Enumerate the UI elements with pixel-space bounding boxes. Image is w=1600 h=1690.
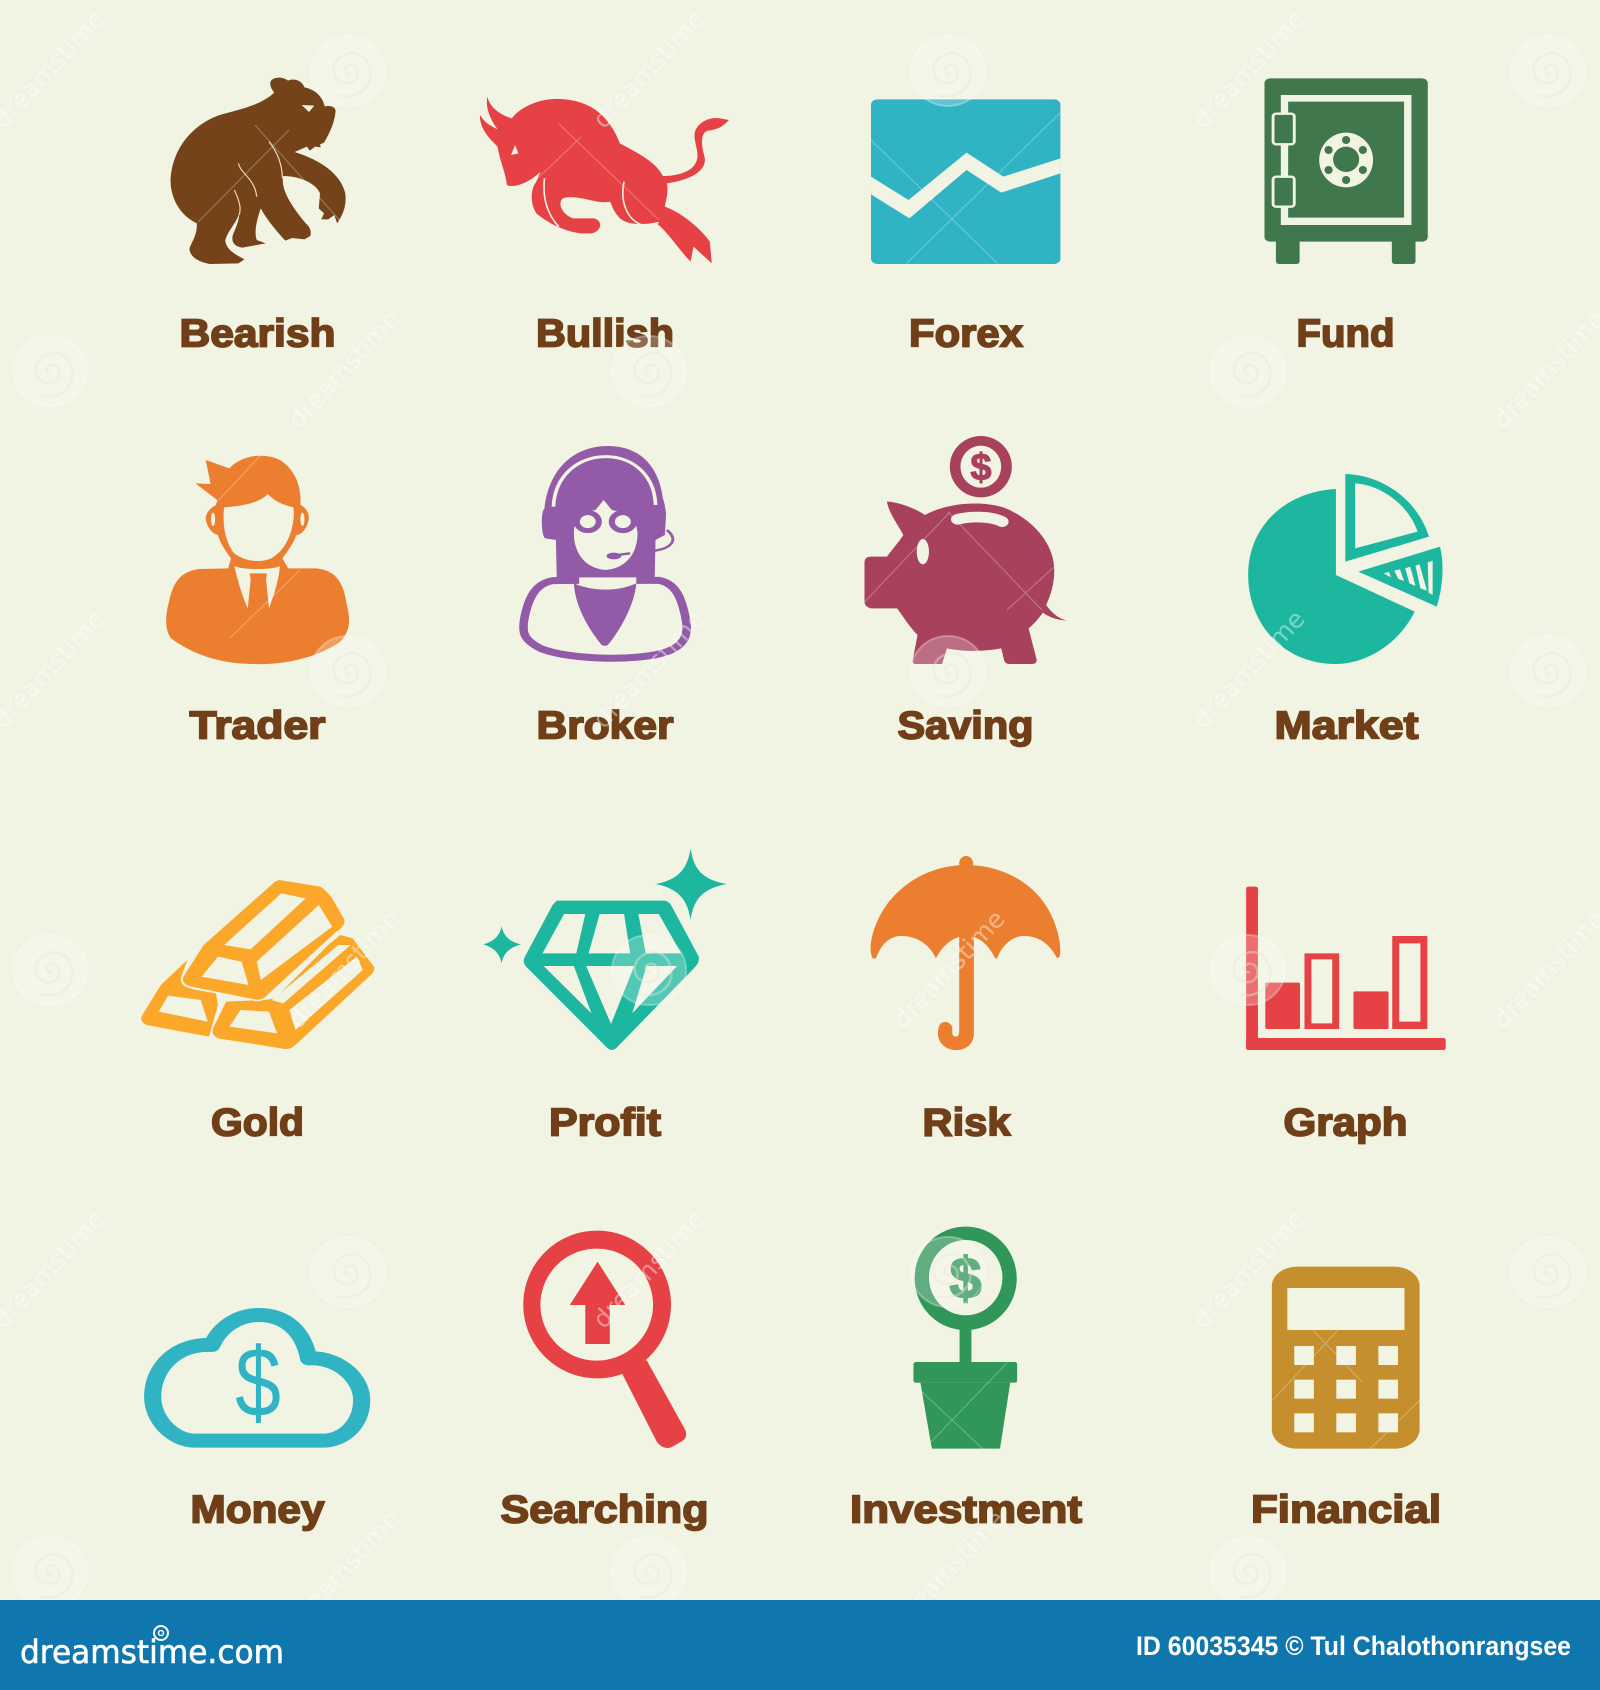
icon: money plant pot: $ (949, 1246, 982, 1311)
watermark: spirals, crossing lines and diagonal text: dreamstime (1187, 1204, 1311, 1334)
panel: Money (153, 1315, 362, 1532)
watermark: spirals, crossing lines and diagonal text: dreamstime (887, 1504, 1011, 1634)
watermark: spirals, crossing lines and diagonal text: dreamstime (587, 604, 711, 734)
logo text: dreamstime.com (20, 1633, 284, 1671)
label: Gold: Gold (211, 1102, 304, 1144)
icon: umbrella (871, 856, 1060, 1050)
watermark: spirals, crossing lines and diagonal text: dreamstime (1187, 4, 1311, 134)
image credit: ID 60035345 © Tul Chalothonrangsee (1136, 1631, 1571, 1661)
label: Market: Market (1274, 704, 1418, 748)
label: Saving: Saving (898, 704, 1034, 748)
watermark: spirals, crossing lines and diagonal text: dreamstime (587, 4, 711, 134)
watermark: spirals, crossing lines and diagonal text: dreamstime (282, 904, 406, 1034)
watermark: spirals, crossing lines and diagonal text: dreamstime (887, 904, 1011, 1034)
panel: Searching (500, 1231, 708, 1532)
icon: bar graph (1246, 887, 1446, 1050)
label: Broker: Broker (536, 704, 674, 748)
icon: bear (171, 78, 346, 264)
label: Financial: Financial (1251, 1488, 1441, 1532)
icon: trader (166, 456, 349, 664)
icon: money plant pot (913, 1227, 1017, 1449)
watermark: spirals, crossing lines and diagonal text: dreamstime (282, 304, 406, 434)
icon: gold bars (141, 880, 374, 1049)
icon: piggy bank (864, 436, 1067, 664)
panel: Graph (1246, 887, 1446, 1144)
icon: cloud with dollar (153, 1315, 362, 1441)
label: Profit: Profit (549, 1102, 661, 1144)
label: Trader: Trader (190, 704, 326, 748)
panel: Market (1248, 474, 1443, 748)
watermark: spirals, crossing lines and diagonal text: dreamstime (282, 1504, 406, 1634)
label: Graph: Graph (1284, 1102, 1408, 1144)
panel: Financial (1251, 1267, 1441, 1532)
footer banner (0, 1600, 1600, 1690)
icon: cloud with dollar: $ (235, 1328, 281, 1438)
label: Bearish: Bearish (180, 312, 336, 356)
panel: Trader (166, 456, 349, 748)
icon: calculator (1272, 1267, 1420, 1449)
icon: forex chart (871, 99, 1060, 264)
panel: Saving (864, 436, 1067, 748)
label: Money: Money (190, 1488, 325, 1532)
panel: Bullish (480, 97, 729, 356)
watermark: spirals, crossing lines and diagonal text: dreamstime (1187, 604, 1311, 734)
icon: safe (1264, 78, 1428, 264)
label: Searching: Searching (500, 1488, 708, 1532)
panel: Fund (1264, 78, 1428, 355)
panel: Bearish (171, 78, 346, 356)
panel: Profit (483, 848, 727, 1144)
panel: Broker (523, 446, 687, 748)
icon: bull (480, 97, 729, 263)
panel: Investment (850, 1227, 1082, 1532)
icon: pie chart (1248, 474, 1443, 664)
watermark: spirals, crossing lines and diagonal text: dreamstime (587, 1204, 711, 1334)
panel: Risk (871, 856, 1060, 1144)
panel: Gold (141, 880, 374, 1144)
icon: broker with headset (523, 446, 687, 658)
icon: coin dollar sign: $ (970, 447, 992, 489)
panel: Forex (871, 99, 1060, 355)
label: Forex: Forex (909, 312, 1023, 356)
label: Bullish: Bullish (536, 312, 674, 356)
label: Fund: Fund (1296, 312, 1394, 356)
icon: magnifier with arrow (523, 1231, 686, 1448)
label: Investment: Investment (850, 1488, 1082, 1532)
icon: diamond with sparkles (483, 848, 727, 1050)
label: Risk: Risk (922, 1102, 1011, 1144)
